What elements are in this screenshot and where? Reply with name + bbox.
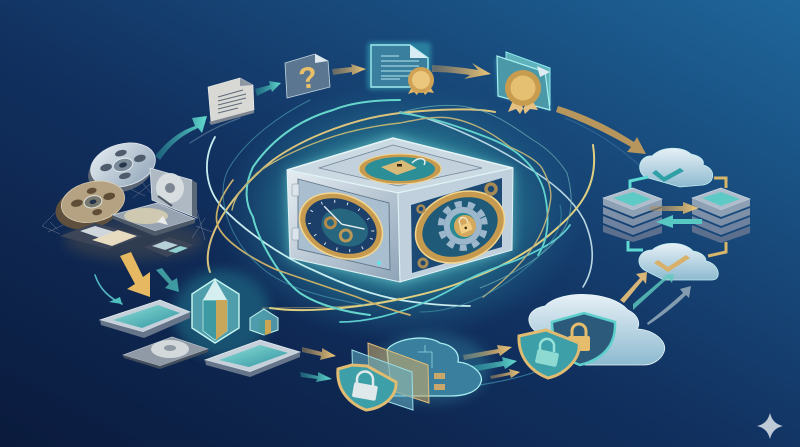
teal link top bbox=[630, 177, 648, 190]
safe left face bbox=[287, 170, 400, 282]
arrow: teal between servers bbox=[656, 215, 702, 228]
lock and gear dial bbox=[405, 178, 515, 276]
teal link bottom bbox=[628, 241, 643, 250]
server tiles bbox=[434, 373, 445, 390]
safe glow bbox=[287, 135, 513, 285]
top cloud bbox=[640, 148, 713, 187]
film reel bronze bbox=[51, 176, 130, 235]
big cloud bbox=[529, 294, 665, 365]
small gears bbox=[418, 184, 496, 267]
padlock emblem bbox=[359, 154, 441, 184]
encrypted cloud gateway bbox=[338, 333, 490, 410]
secured cloud cluster bbox=[519, 294, 665, 378]
ring: teal left bbox=[247, 100, 400, 315]
server and cloud cluster bbox=[603, 148, 750, 280]
arrows: to secured cloud bbox=[463, 345, 520, 379]
legacy media cluster bbox=[42, 136, 212, 260]
arrow: gold from media to tablets bbox=[120, 252, 150, 297]
arrow: teal to tablets bbox=[156, 268, 179, 292]
ring: pale white sweep right bbox=[400, 112, 592, 287]
arrows: up to bottom cloud bbox=[620, 272, 691, 325]
ring: bright gold upper bbox=[208, 109, 495, 272]
medal bbox=[505, 70, 541, 114]
arrow: gold question to certificate bbox=[332, 64, 366, 75]
rear shield with gold lock bbox=[552, 313, 615, 365]
crystal glow bbox=[174, 270, 270, 358]
glass tablet one bbox=[100, 300, 190, 338]
ring: muted right bbox=[400, 105, 571, 288]
certified folder bbox=[495, 52, 551, 114]
network diagram bbox=[418, 345, 432, 368]
bottom cloud bbox=[639, 243, 718, 280]
glass panel bbox=[352, 350, 413, 410]
glass tablet two bbox=[205, 340, 300, 377]
gold link bottom bbox=[708, 242, 726, 256]
front shield with teal lock bbox=[519, 330, 579, 378]
floppy disk bbox=[60, 223, 143, 249]
unknown document with question mark: ? bbox=[297, 61, 319, 96]
sparkle mark bbox=[757, 413, 783, 439]
arrow: teal arc from media to document bbox=[155, 116, 207, 160]
unknown document with question mark bbox=[285, 54, 330, 98]
ring: teal right bbox=[400, 113, 548, 255]
hard drive bbox=[123, 337, 208, 369]
right server stack bbox=[692, 188, 750, 243]
arrow: gold to cloud bbox=[556, 106, 646, 154]
arrow: teal document to question bbox=[255, 81, 281, 96]
arrow head: teal thin bbox=[109, 297, 122, 304]
gold link top bbox=[714, 178, 726, 188]
safe right face bbox=[398, 168, 513, 282]
arrow: gold certificate to folder bbox=[432, 63, 491, 79]
gold panel bbox=[368, 343, 429, 403]
document with corner fold bbox=[208, 78, 254, 125]
cloud glow bbox=[374, 333, 490, 403]
small floppy disk bbox=[144, 237, 194, 257]
ring: bright gold lower bbox=[270, 145, 594, 310]
orbit rings bbox=[207, 100, 594, 322]
certified document bbox=[367, 42, 434, 95]
clock dial bbox=[290, 181, 392, 271]
ring: pale white sweep bbox=[207, 137, 470, 306]
cloud bbox=[387, 338, 481, 396]
small crystal bbox=[250, 309, 278, 335]
cobwebs bbox=[42, 178, 212, 240]
ring: gold left lower bbox=[216, 180, 410, 315]
ribbon rosette bbox=[408, 67, 434, 95]
upright hard drive bbox=[150, 168, 197, 218]
flat drive bbox=[112, 203, 195, 236]
ring: muted lower right bbox=[420, 205, 561, 312]
left server stack bbox=[603, 188, 662, 242]
outer cycle thin arcs bbox=[95, 118, 655, 385]
large crystal bbox=[192, 279, 239, 343]
film reel silver bbox=[82, 136, 162, 200]
arrows: to encrypted gateway bbox=[300, 347, 336, 382]
arrow: gold between servers bbox=[650, 202, 699, 214]
ring: teal bottom bbox=[340, 225, 570, 322]
central safe cube bbox=[287, 135, 515, 285]
migrated media cluster bbox=[100, 270, 300, 377]
dusty ground bbox=[65, 220, 205, 260]
ring: gold right bbox=[400, 117, 551, 297]
ring: gold top left inner bbox=[232, 123, 400, 210]
safe top face bbox=[287, 138, 513, 193]
shield with padlock bbox=[338, 365, 396, 410]
ring: muted left bbox=[223, 100, 365, 305]
